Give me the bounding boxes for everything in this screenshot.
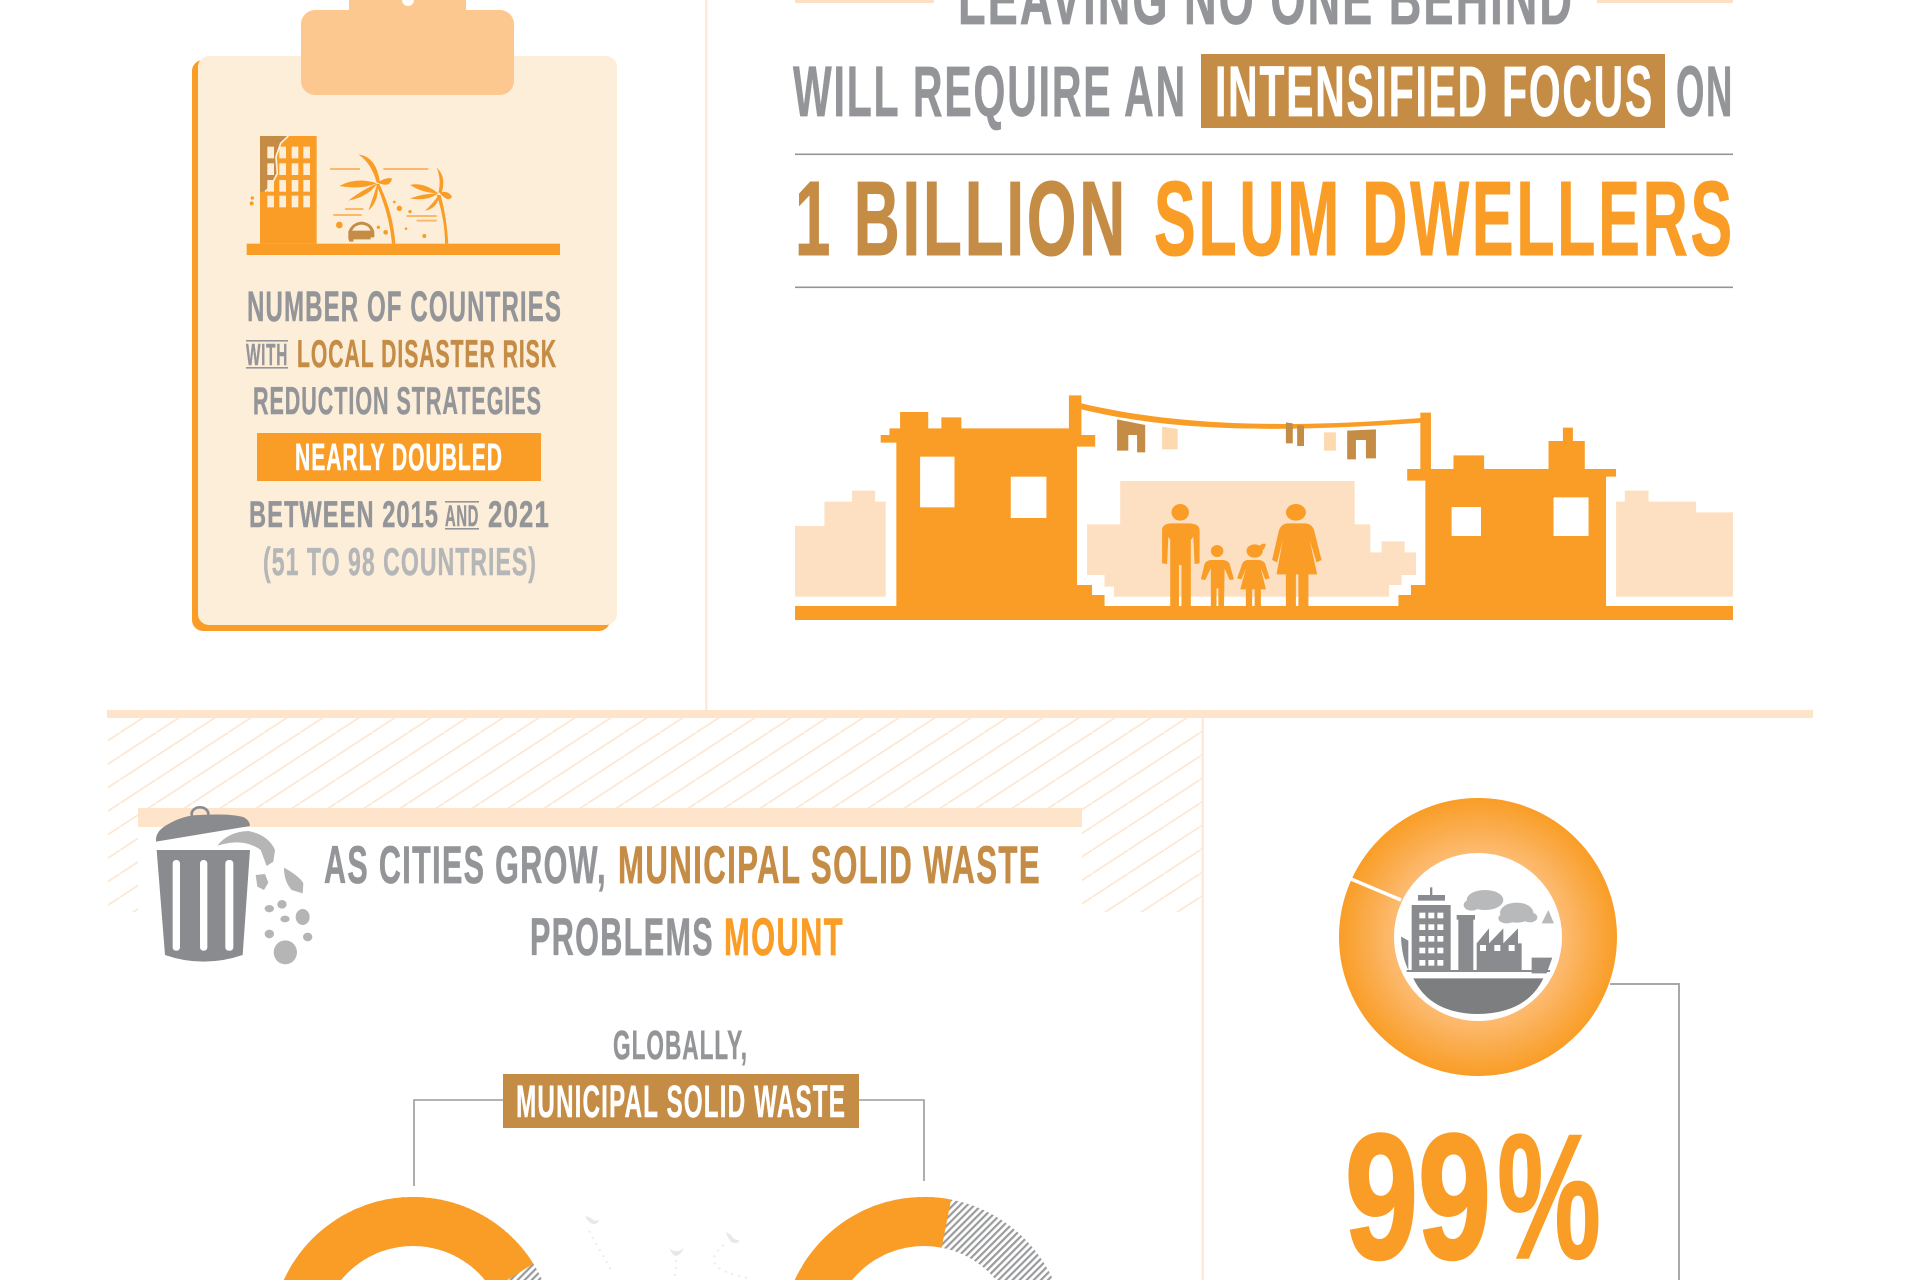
donut chart: 99 percent ring [1351, 826, 1590, 1048]
accent bar right [1597, 0, 1733, 3]
callout: nearly doubled [257, 433, 541, 481]
heading: municipal solid waste: MUNICIPAL SOLID WASTE [618, 836, 1041, 895]
highlight: intensified focus [1201, 53, 1665, 132]
connector line [1610, 984, 1679, 1280]
text: between 2015: BETWEEN 2015 [249, 494, 439, 535]
heading: problems: PROBLEMS [530, 908, 714, 967]
callout: nearly doubled: NEARLY DOUBLED [295, 437, 503, 479]
text: 51 to 98 countries: (51 TO 98 COUNTRIES) [263, 541, 537, 584]
panel: disaster risk clipboard: AND [445, 500, 479, 533]
panel: disaster risk clipboard [192, 0, 617, 631]
icon: overflowing trash can [156, 807, 312, 964]
text: number of countries: NUMBER OF COUNTRIES [247, 283, 562, 331]
accent bar left [795, 0, 934, 3]
text: 1 billion: 1 BILLION [795, 160, 1128, 278]
heading word: on: ON [1676, 53, 1734, 132]
vertical divider bottom [1202, 718, 1204, 1280]
panel: 99 percent [1345, 826, 1679, 1280]
heading: as cities grow: AS CITIES GROW, [324, 836, 607, 895]
text: globally: GLOBALLY, [613, 1022, 748, 1068]
vertical divider top [705, 0, 708, 712]
text: 2021: 2021 [488, 494, 550, 535]
text: and [445, 500, 479, 533]
decor: faint sprouts [585, 1216, 748, 1278]
illustration: slum houses and family [795, 395, 1733, 620]
icon: storm hitting building and palm trees [247, 136, 560, 255]
label: municipal solid waste: MUNICIPAL SOLID WASTE [516, 1076, 846, 1127]
clipboard shadow edge [192, 60, 610, 631]
icon: city with factory [1401, 887, 1554, 1014]
heading bar [138, 808, 1082, 827]
hatched background [108, 718, 1202, 912]
heading line 2: WILL REQUIRE AN [793, 53, 1187, 132]
label: municipal solid waste [503, 1074, 859, 1128]
connector lines [414, 1100, 924, 1186]
text: local disaster risk: LOCAL DISASTER RISK [297, 333, 557, 376]
heading: mount: MOUNT [724, 908, 844, 967]
clipboard board [198, 56, 617, 625]
donut chart: right [795, 1197, 1053, 1280]
clipboard clip [301, 0, 514, 95]
donut chart: left [284, 1197, 542, 1280]
panel: disaster risk clipboard: WITH [246, 337, 288, 372]
text: with [246, 337, 288, 372]
divider: thick peach band [107, 710, 1813, 718]
text: reduction strategies: REDUCTION STRATEGIES [253, 380, 542, 423]
panel: municipal solid waste [138, 807, 1082, 1280]
panel: slum dwellers heading [793, 0, 1735, 288]
